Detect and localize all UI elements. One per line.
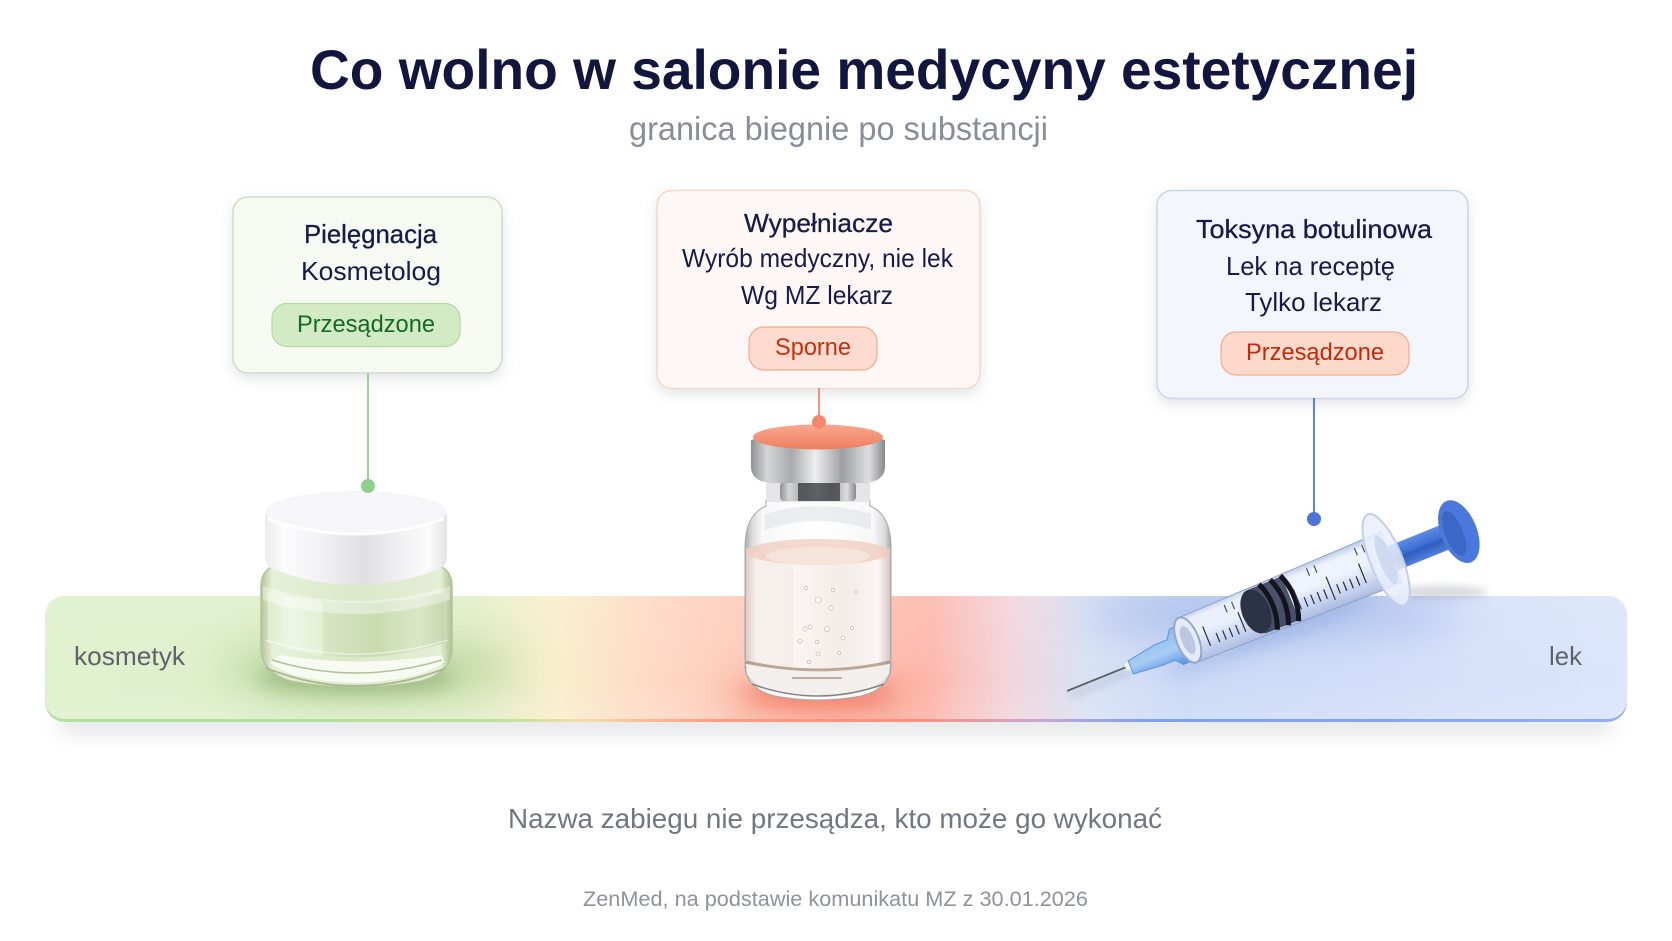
status pill: Przesądzone [1221, 332, 1409, 375]
panel: botulinum toxin card [1157, 190, 1468, 398]
icon: syringe [1048, 479, 1493, 735]
card text: Wyrób medyczny, nie lek: Wyrób medyczny, nie lek [682, 243, 954, 273]
status pill: Przesądzone: Przesądzone [1246, 339, 1384, 366]
panel: fillers card [657, 190, 980, 388]
card text: Lek na receptę: Lek na receptę [1226, 251, 1395, 281]
icon: cream jar [256, 491, 456, 692]
connector: fillers [812, 388, 826, 429]
card text: Wg MZ lekarz: Wg MZ lekarz [741, 280, 893, 310]
title: Co wolno w salonie medycyny estetycznej [310, 38, 1418, 101]
source: ZenMed, na podstawie komunikatu MZ z 30.01.2026 [583, 888, 1088, 911]
subtitle: granica biegnie po substancji [629, 110, 1048, 147]
card text: Tylko lekarz: Tylko lekarz [1245, 287, 1382, 317]
card text: Toksyna botulinowa: Toksyna botulinowa [1196, 214, 1433, 244]
footer note: Nazwa zabiegu nie przesądza, kto może go wykonać [508, 803, 1162, 834]
status pill: Sporne [749, 327, 877, 370]
band end label: kosmetyk: kosmetyk [74, 641, 186, 671]
connector: cosmetics [361, 373, 375, 493]
card text: Pielęgnacja: Pielęgnacja [304, 219, 438, 249]
spectrum band: cosmetic to drug [45, 586, 1627, 732]
connector: botulinum toxin [1307, 398, 1321, 526]
card text: Wypełniacze: Wypełniacze [744, 208, 893, 238]
panel: cosmetics card [233, 197, 502, 373]
status pill: Przesądzone [272, 304, 460, 346]
band end label: lek: lek [1549, 641, 1583, 671]
status pill: Przesądzone: Przesądzone [297, 311, 435, 338]
icon: filler vial [742, 424, 894, 706]
status pill: Sporne: Sporne [775, 334, 851, 361]
card text: Kosmetolog: Kosmetolog [301, 256, 441, 286]
